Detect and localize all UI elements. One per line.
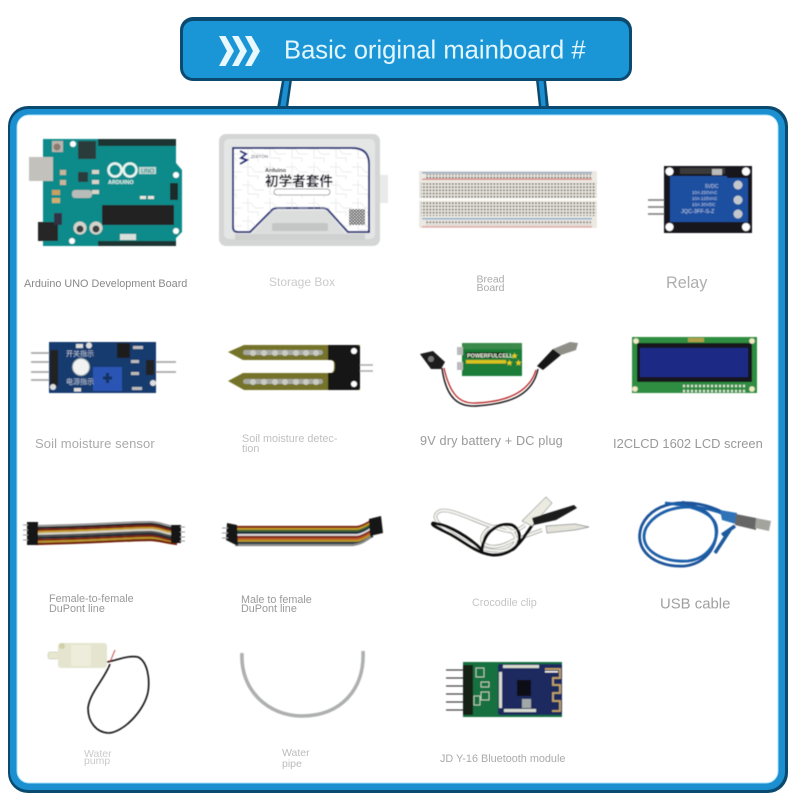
label: Bread Board: Bread — [476, 274, 505, 286]
label: JD Y-16 Bluetooth module: JD Y-16 Bluetooth module — [440, 753, 565, 765]
label: Crocodile clip: Crocodile clip — [472, 597, 537, 609]
label: 9V dry battery + DC plug: 9V dry battery + DC plug — [420, 434, 563, 448]
item: relay module: 5VDC — [705, 184, 719, 190]
item: soil moisture probe — [228, 345, 373, 390]
item: USB cable — [640, 502, 771, 566]
item: soil moisture sensor: 电源指示 — [66, 377, 94, 386]
item: 9V battery and DC plug: ★ — [511, 352, 518, 360]
item: male-to-female DuPont wires — [222, 516, 383, 546]
label: Relay: Relay — [666, 274, 708, 292]
item: storage box — [219, 134, 388, 246]
item: 9V battery and DC plug: ★ — [506, 359, 513, 367]
item: water pipe — [242, 651, 363, 716]
label: Female-to-female DuPont line — [49, 593, 134, 615]
item: LCD 1602 screen — [632, 337, 757, 393]
label: Bread Board: Board — [476, 282, 505, 294]
label: Arduino UNO Development Board: Arduino UNO Development Board — [24, 278, 187, 290]
item: relay module — [648, 166, 752, 233]
label: Soil moisture detection — [242, 433, 338, 455]
connector struts — [277, 80, 549, 108]
label: Male to female DuPont line — [241, 594, 312, 615]
item: storage box: ZHIYON — [251, 154, 268, 159]
item: Arduino UNO board — [29, 139, 182, 246]
label: I2CLCD 1602 LCD screen: I2CLCD 1602 LCD screen — [613, 436, 763, 451]
title text: Basic original mainboard # — [284, 36, 586, 64]
label: Water pipe: pipe — [282, 758, 302, 770]
label: Male to female DuPont line: Male to female — [241, 594, 312, 606]
item: breadboard — [419, 171, 597, 228]
item: relay module: 10A 250VAC — [692, 190, 718, 195]
item: water pump — [48, 643, 149, 733]
label: Female-to-female DuPont line: Female-to-female — [49, 593, 134, 605]
icon: triple chevron — [219, 36, 260, 66]
item: female-to-female DuPont wires — [23, 522, 185, 545]
label: Soil moisture sensor: Soil moisture sensor — [35, 436, 155, 451]
label: Male to female DuPont line: DuPont line — [241, 603, 297, 615]
item: soil moisture sensor — [31, 342, 176, 393]
item: JD Y-16 Bluetooth module — [446, 662, 562, 717]
label: Soil moisture detection: Soil moisture detec- — [242, 433, 338, 445]
label: Water pump — [84, 748, 112, 767]
label: Water pump: Water — [84, 748, 112, 760]
item: 9V battery and DC plug — [420, 342, 578, 406]
arduino logo — [108, 164, 136, 176]
label: Storage Box: Storage Box — [269, 275, 335, 289]
label: Water pipe — [282, 747, 310, 770]
label: Water pump: pump — [84, 755, 110, 767]
item: Arduino UNO board: UNO — [141, 169, 155, 175]
item: relay module: JQC-3FF-S-Z — [681, 209, 715, 215]
item: Arduino UNO board: ARDUINO — [108, 180, 134, 186]
label: Bread Board — [476, 274, 505, 294]
title banner — [180, 17, 632, 81]
item: 9V battery and DC plug: ★ — [515, 359, 522, 367]
item: crocodile clip — [432, 497, 589, 555]
item: soil moisture sensor: 开关指示 — [66, 349, 94, 358]
item: relay module: 10A 125VAC — [692, 196, 718, 201]
item: relay module: 10A 30VDC — [692, 202, 716, 207]
label: Soil moisture detection: tion — [242, 443, 259, 455]
item: storage box: Arduino — [265, 168, 287, 174]
label: Female-to-female DuPont line: DuPont line — [49, 603, 105, 615]
item: storage box: 初学者套件 — [265, 173, 333, 189]
item: 9V battery and DC plug: POWERFULCELL — [467, 354, 513, 360]
label: Water pipe: Water — [282, 747, 310, 759]
label: USB cable: USB cable — [660, 596, 730, 612]
